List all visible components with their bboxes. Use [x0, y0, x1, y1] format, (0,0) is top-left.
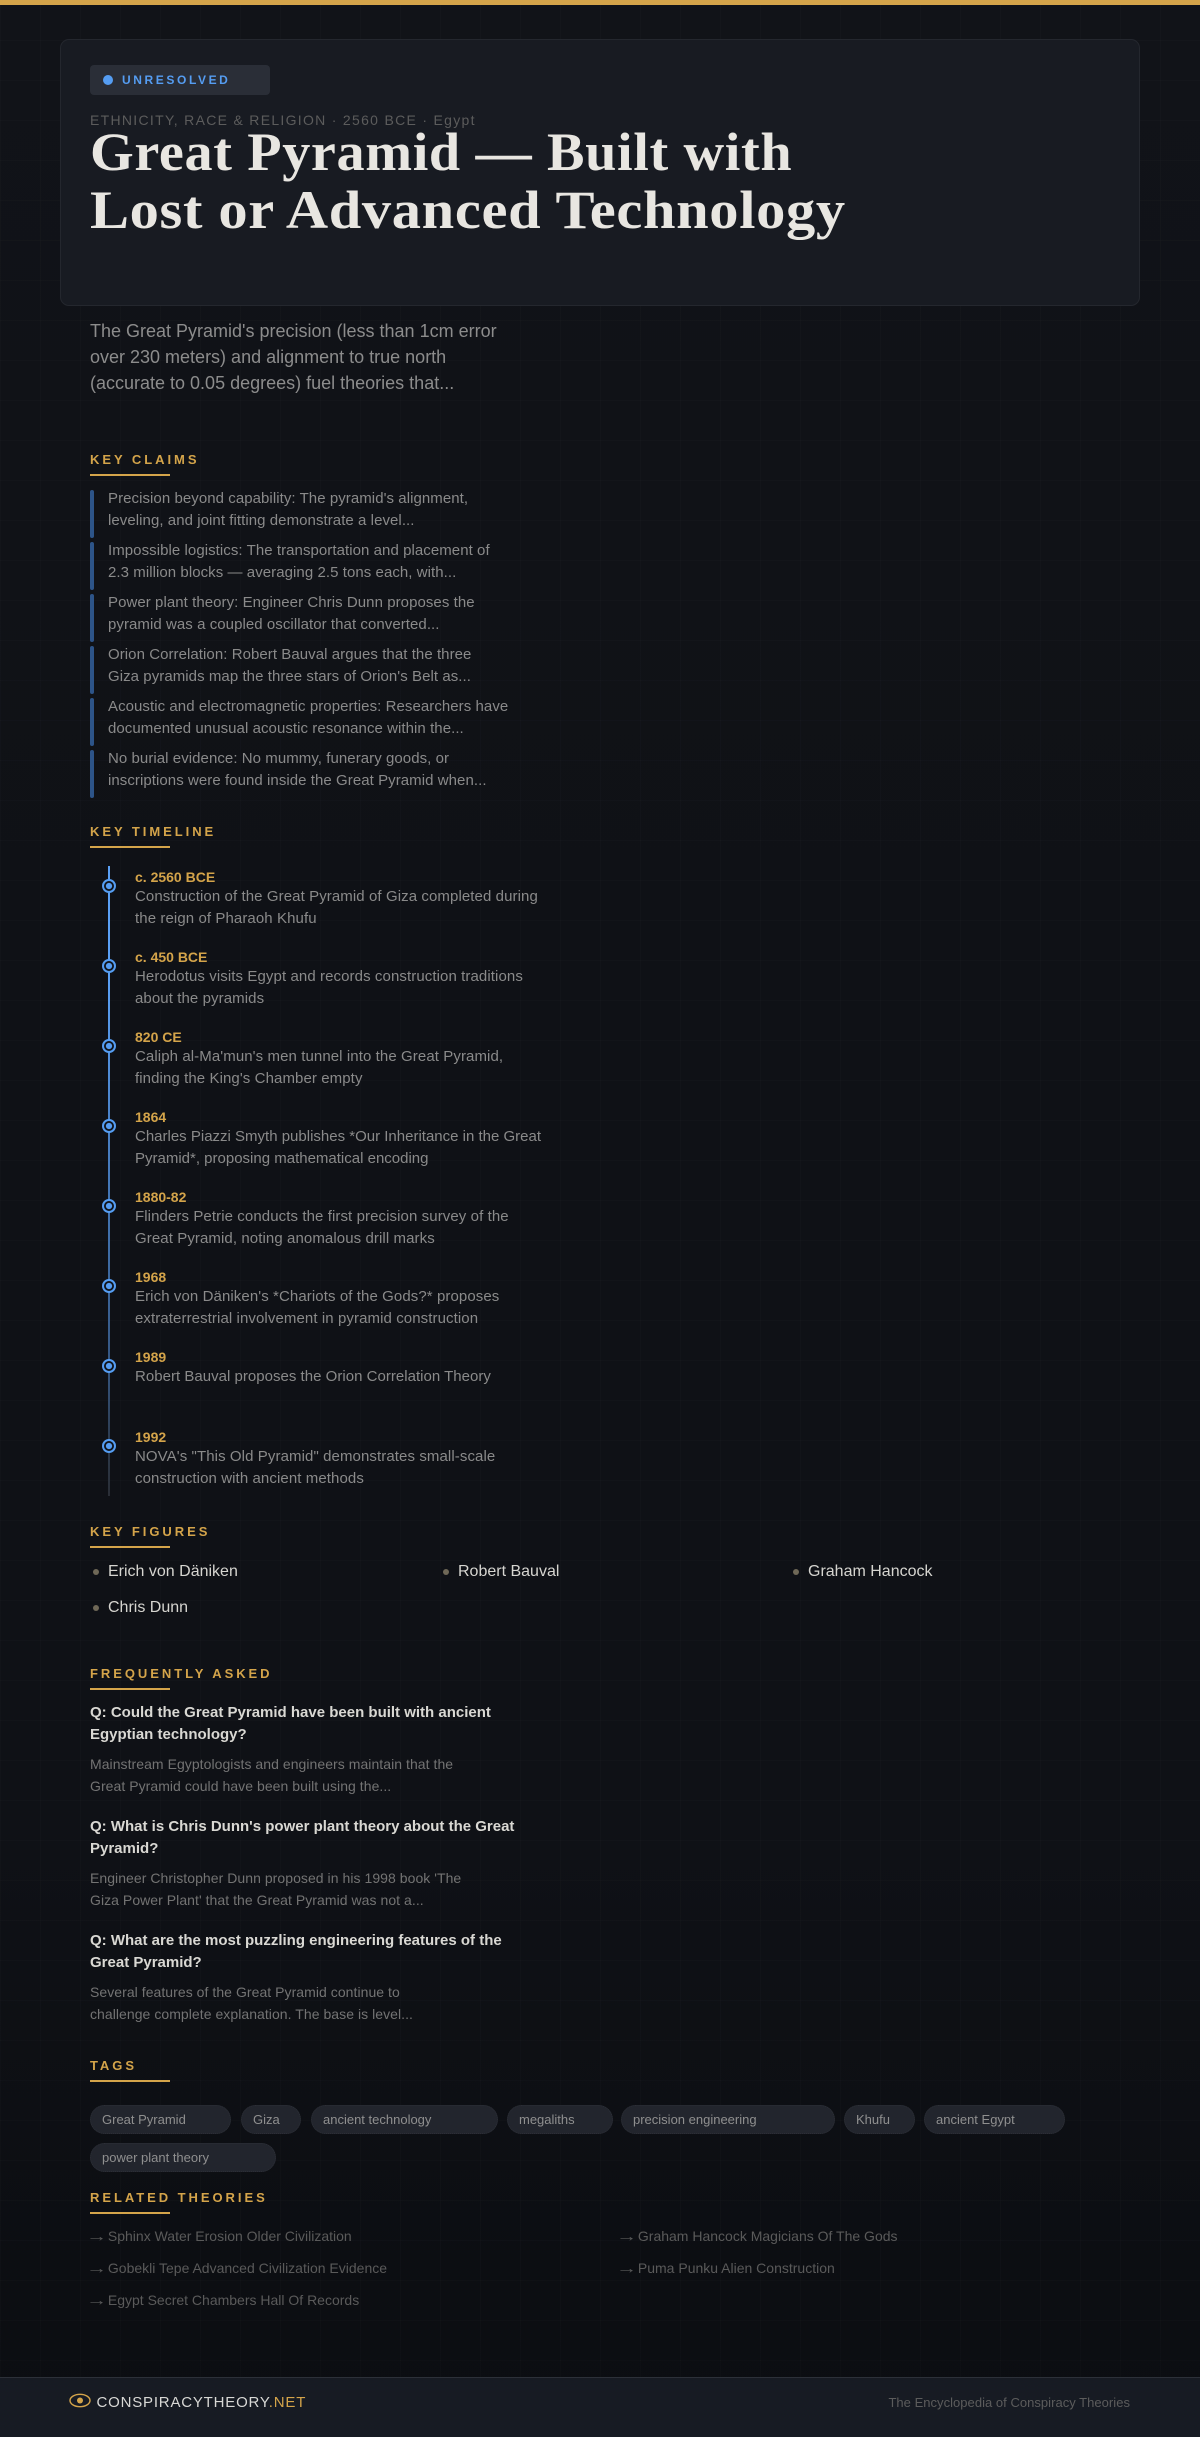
event: 1864: Pyramid*, proposing mathematical encoding: [135, 1150, 428, 1167]
tag: ancient Egypt: [936, 2112, 1015, 2127]
faq item 1: Q: Could the Great Pyramid have been built with ancient: [90, 1704, 491, 1721]
event: 1968: [102, 1269, 499, 1327]
faq item 2: Giza Power Plant' that the Great Pyramid was not a...: [90, 1892, 424, 1908]
event: 1992: [102, 1429, 495, 1487]
link: Gobekli Tepe Advanced Civilization Evidence: [108, 2260, 387, 2276]
claim: acoustic: [90, 698, 508, 746]
title: Lost or Advanced Technology: [90, 180, 846, 240]
event: 1864: 1864: [135, 1109, 166, 1125]
status badge: unresolved: [90, 65, 270, 95]
event: 820 CE: [102, 1029, 503, 1087]
event: 1992: 1992: [135, 1429, 166, 1445]
panel: hero header: [60, 39, 1140, 306]
tag: ancient technology: [323, 2112, 431, 2127]
tag: Great Pyramid: [102, 2112, 186, 2127]
link: →: [86, 2292, 107, 2308]
link: →: [86, 2228, 107, 2244]
tag: [90, 2143, 276, 2172]
faq item 1: [90, 1704, 491, 1794]
claim: power plant: pyramid was a coupled oscillator that converted...: [108, 616, 440, 633]
link: →: [86, 2260, 107, 2276]
panel: key claims list: [90, 490, 508, 798]
claim: orion: Orion Correlation: Robert Bauval argues that the three: [108, 646, 471, 663]
event: 1992: construction with ancient methods: [135, 1470, 364, 1487]
event: 1880-82: [102, 1189, 509, 1247]
faq item 2: Q: What is Chris Dunn's power plant theory about the Great: [90, 1818, 514, 1835]
tag: Giza: [253, 2112, 280, 2127]
heading: key timeline: KEY TIMELINE: [90, 824, 216, 839]
event: 450 BCE: c. 450 BCE: [135, 949, 207, 965]
top accent bar: [0, 0, 1200, 5]
link: →: [616, 2260, 637, 2276]
claim: acoustic: Acoustic and electromagnetic properties: Researchers have: [108, 698, 508, 715]
claim: orion: Giza pyramids map the three stars of Orion's Belt as...: [108, 668, 471, 685]
summary text: [90, 321, 497, 393]
event: 450 BCE: about the pyramids: [135, 990, 264, 1007]
figure: Robert Bauval: Robert Bauval: [458, 1563, 559, 1580]
claim: precision: [90, 490, 468, 538]
link: Graham Hancock Magicians Of The Gods: [638, 2228, 898, 2244]
event: 1864: [102, 1109, 541, 1167]
event: 1989: Robert Bauval proposes the Orion Correlation Theory: [135, 1368, 491, 1385]
icon: eye logo: [69, 2394, 91, 2408]
tag: [311, 2105, 498, 2134]
figure: Erich von Däniken: Erich von Däniken: [108, 1563, 238, 1580]
heading: key figures: KEY FIGURES: [90, 1524, 210, 1539]
claim: logistics: Impossible logistics: The transportation and placement of: [108, 542, 490, 559]
heading: tags: TAGS: [90, 2058, 137, 2073]
event: 1989: [102, 1349, 491, 1385]
faq item 3: Several features of the Great Pyramid continue to: [90, 1984, 400, 2000]
claim: burial: inscriptions were found inside the Great Pyramid when...: [108, 772, 487, 789]
panel: footer: [0, 2377, 1200, 2437]
summary text: The Great Pyramid's precision (less than 1cm error: [90, 321, 497, 341]
event: 2560 BCE: c. 2560 BCE: [135, 869, 215, 885]
claim: precision: Precision beyond capability: The pyramid's alignment,: [108, 490, 468, 507]
faq item 1: Egyptian technology?: [90, 1726, 247, 1743]
event: 1989: 1989: [135, 1349, 166, 1365]
event: 1880-82: Flinders Petrie conducts the first precision survey of the: [135, 1208, 509, 1225]
event: 1880-82: Great Pyramid, noting anomalous drill marks: [135, 1230, 435, 1247]
link: Egypt Secret Chambers Hall Of Records: [108, 2292, 359, 2308]
faq item 3: Great Pyramid?: [90, 1954, 202, 1971]
event: 1880-82: 1880-82: [135, 1189, 186, 1205]
event: 820 CE: Caliph al-Ma'mun's men tunnel into the Great Pyramid,: [135, 1048, 503, 1065]
tag: [924, 2105, 1065, 2134]
faq item 3: challenge complete explanation. The base is level...: [90, 2006, 413, 2022]
title: Great Pyramid — Built with: [90, 122, 792, 182]
tag: precision engineering: [633, 2112, 757, 2127]
claim: burial: No burial evidence: No mummy, funerary goods, or: [108, 750, 449, 767]
event: 2560 BCE: [102, 869, 538, 927]
heading: related theories: RELATED THEORIES: [90, 2190, 268, 2205]
claim: power plant: Power plant theory: Engineer Chris Dunn proposes the: [108, 594, 475, 611]
icon: status dot: [103, 75, 113, 85]
tag: [507, 2105, 613, 2134]
event: 2560 BCE: the reign of Pharaoh Khufu: [135, 910, 317, 927]
panel: timeline: [102, 866, 541, 1496]
badge label: UNRESOLVED: [122, 73, 230, 87]
panel: tags: [90, 2105, 1065, 2172]
figure: Graham Hancock: Graham Hancock: [808, 1563, 932, 1580]
faq item 3: [90, 1932, 502, 2022]
event: 1968: Erich von Däniken's *Chariots of the Gods?* proposes: [135, 1288, 499, 1305]
event: 1992: NOVA's "This Old Pyramid" demonstrates small-scale: [135, 1448, 495, 1465]
tag: megaliths: [519, 2112, 575, 2127]
tag: [241, 2105, 301, 2134]
link: Puma Punku Alien Construction: [638, 2260, 835, 2276]
event: 1968: extraterrestrial involvement in pyramid construction: [135, 1310, 478, 1327]
footer tagline: The Encyclopedia of Conspiracy Theories: [888, 2395, 1130, 2410]
claim: burial: [90, 750, 487, 798]
meta line: ETHNICITY, RACE & RELIGION · 2560 BCE · Egypt: [90, 112, 476, 128]
timeline axis: [108, 866, 110, 1496]
heading: key claims: KEY CLAIMS: [90, 452, 199, 467]
event: 2560 BCE: Construction of the Great Pyramid of Giza completed during: [135, 888, 538, 905]
panel: related theories: [86, 2228, 898, 2308]
link: Sphinx Water Erosion Older Civilization: [108, 2228, 352, 2244]
tag: power plant theory: [102, 2150, 209, 2165]
summary text: over 230 meters) and alignment to true north: [90, 347, 446, 367]
claim: logistics: 2.3 million blocks — averaging 2.5 tons each, with...: [108, 564, 456, 581]
tag: Khufu: [856, 2112, 890, 2127]
brand wordmark: CONSPIRACYTHEORY.NET: [96, 2394, 306, 2411]
claim: orion: [90, 646, 471, 694]
figure: Chris Dunn: Chris Dunn: [108, 1599, 188, 1616]
event: 820 CE: finding the King's Chamber empty: [135, 1070, 363, 1087]
event: 820 CE: 820 CE: [135, 1029, 182, 1045]
summary text: (accurate to 0.05 degrees) fuel theories that...: [90, 373, 454, 393]
faq item 1: Great Pyramid could have been built using the...: [90, 1778, 391, 1794]
event: 450 BCE: Herodotus visits Egypt and records construction traditions: [135, 968, 523, 985]
claim: power plant: [90, 594, 475, 642]
claim: logistics: [90, 542, 490, 590]
link: →: [616, 2228, 637, 2244]
panel: key figures: [93, 1563, 932, 1616]
claim: precision: leveling, and joint fitting demonstrate a level...: [108, 512, 415, 529]
faq item 2: Pyramid?: [90, 1840, 158, 1857]
tag: [90, 2105, 231, 2134]
claim: acoustic: documented unusual acoustic resonance within the...: [108, 720, 464, 737]
faq item 2: [90, 1818, 514, 1908]
event: 450 BCE: [102, 949, 523, 1007]
tag: [844, 2105, 915, 2134]
faq item 2: Engineer Christopher Dunn proposed in his 1998 book 'The: [90, 1870, 461, 1886]
title: [90, 122, 846, 240]
tag: [621, 2105, 835, 2134]
heading: frequently asked: FREQUENTLY ASKED: [90, 1666, 273, 1681]
event: 1968: 1968: [135, 1269, 166, 1285]
event: 1864: Charles Piazzi Smyth publishes *Our Inheritance in the Great: [135, 1128, 541, 1145]
faq item 1: Mainstream Egyptologists and engineers maintain that the: [90, 1756, 453, 1772]
faq item 3: Q: What are the most puzzling engineering features of the: [90, 1932, 502, 1949]
